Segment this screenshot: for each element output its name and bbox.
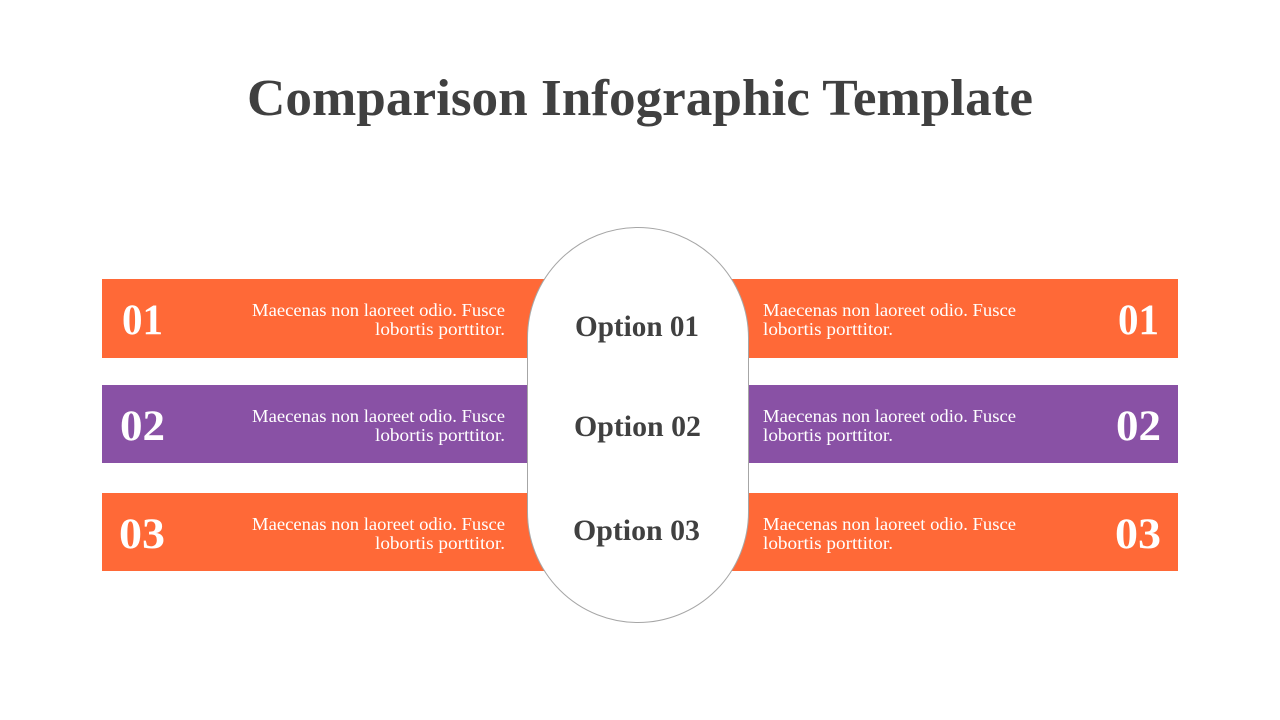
- central pill: [528, 228, 748, 622]
- description right 1: Maecenas non laoreet odio. Fusce: [763, 300, 1016, 320]
- description left 3: Maecenas non laoreet odio. Fusce: [252, 514, 505, 534]
- description right 2: Maecenas non laoreet odio. Fusce: [763, 406, 1016, 426]
- option 01: Option 01: [575, 310, 699, 343]
- description left 2: Maecenas non laoreet odio. Fusce: [252, 406, 505, 426]
- option 02: Option 02: [574, 410, 701, 443]
- option 03: Option 03: [573, 514, 700, 547]
- row 1 band: [102, 279, 1178, 358]
- description left 2: lobortis porttitor.: [375, 425, 505, 445]
- number 02 left: 02: [120, 403, 165, 450]
- description right 3: lobortis porttitor.: [763, 533, 893, 553]
- description left 1: lobortis porttitor.: [375, 319, 505, 339]
- right panel: row 3: [763, 511, 1161, 558]
- row 2 band: [102, 385, 1178, 463]
- description right 3: [763, 514, 1016, 553]
- description right 1: [763, 300, 1016, 339]
- number 01 left: 01: [122, 297, 163, 344]
- description left 3: [252, 514, 505, 553]
- description right 2: [763, 406, 1016, 445]
- left panel: row 3: [119, 511, 505, 558]
- option labels: [573, 310, 701, 547]
- description left 1: Maecenas non laoreet odio. Fusce: [252, 300, 505, 320]
- number 02 right: 02: [1116, 403, 1161, 450]
- description left 2: [252, 406, 505, 445]
- left panel: row 2: [120, 403, 505, 450]
- row 3 band: [102, 493, 1178, 571]
- right panel: row 2: [763, 403, 1161, 450]
- right panel: row 1: [763, 297, 1159, 344]
- description left 3: lobortis porttitor.: [375, 533, 505, 553]
- description right 2: lobortis porttitor.: [763, 425, 893, 445]
- number 03 left: 03: [119, 511, 165, 558]
- description right 3: Maecenas non laoreet odio. Fusce: [763, 514, 1016, 534]
- number 01 right: 01: [1118, 297, 1159, 344]
- description right 1: lobortis porttitor.: [763, 319, 893, 339]
- number 03 right: 03: [1115, 511, 1161, 558]
- title: Comparison Infographic Template: [247, 70, 1033, 127]
- left panel: row 1: [122, 297, 505, 344]
- description left 1: [252, 300, 505, 339]
